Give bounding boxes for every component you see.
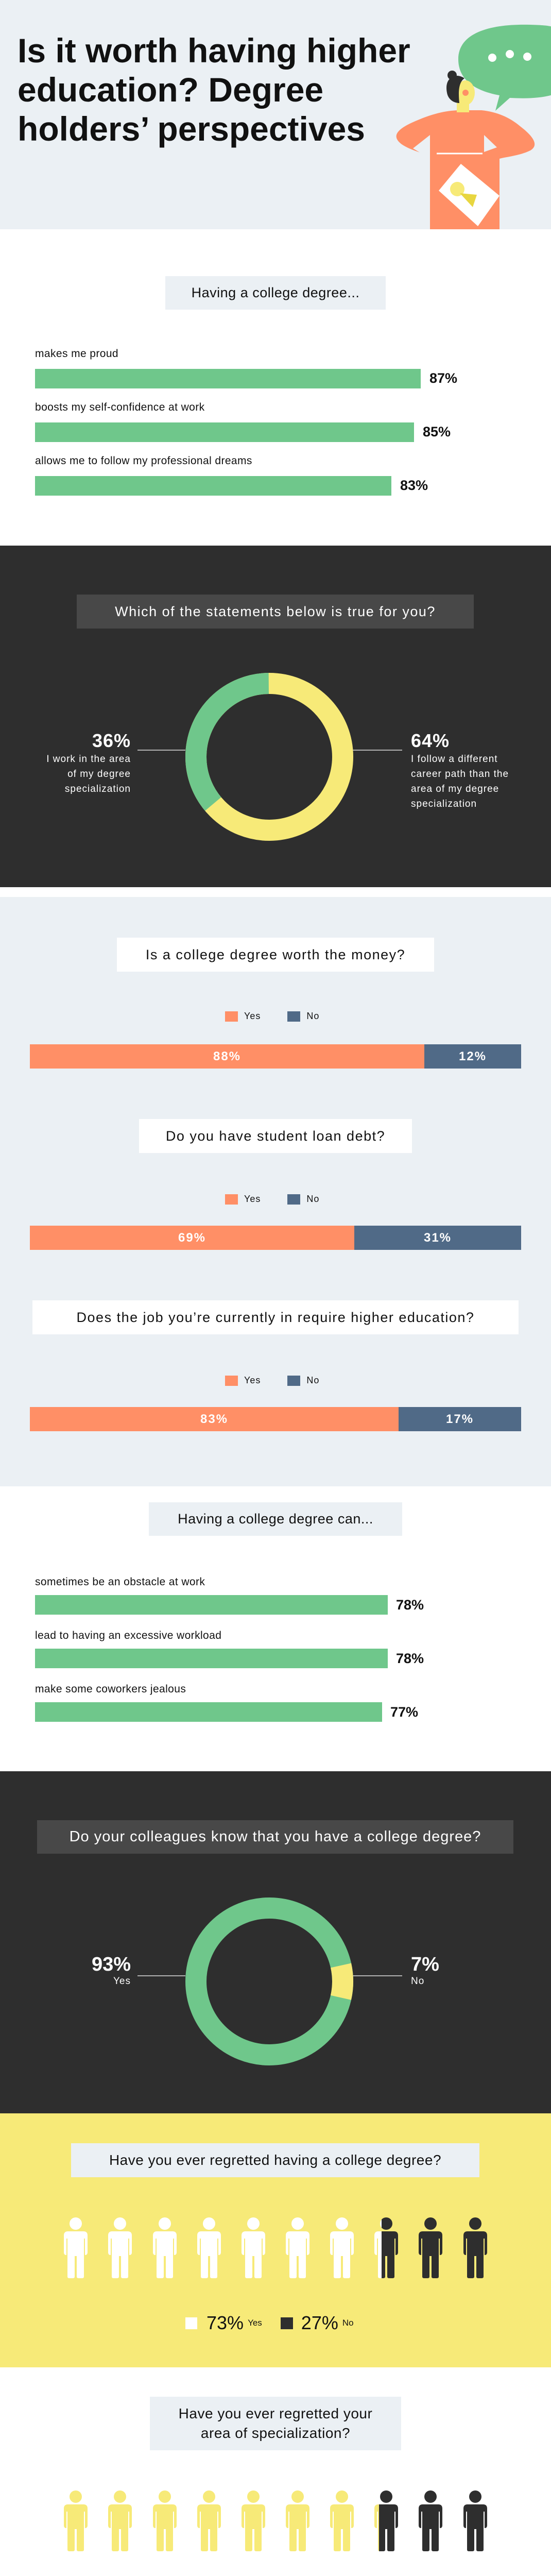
question: worth the money: 88% xyxy=(213,1049,241,1063)
bar: makes me proud xyxy=(35,348,457,388)
heading: Have you ever regretted your xyxy=(179,2405,372,2421)
question: job requires higher education: 83% xyxy=(200,1412,228,1426)
title: Is it worth having higher education? Degree holders’ perspectives xyxy=(18,31,410,148)
question: worth the money: Yes xyxy=(244,1011,261,1021)
pictogram: people 73% xyxy=(64,2217,487,2278)
bar: excessive workload: lead to having an excessive workload xyxy=(35,1630,221,1641)
question: worth the money: Is a college degree worth the money? xyxy=(146,947,405,962)
callout: 64%: I follow a different xyxy=(411,754,498,765)
heading xyxy=(150,2397,401,2450)
panel: regretted specialization xyxy=(64,2397,487,2551)
bar: boosts self-confidence: boosts my self-confidence at work xyxy=(35,401,205,413)
question: job requires higher education: No xyxy=(306,1375,319,1385)
donut chart xyxy=(137,1897,402,2065)
callout: 36%: I work in the area xyxy=(46,754,131,765)
question: student loan debt: Do you have student loan debt? xyxy=(166,1128,385,1144)
question: job requires higher education: 17% xyxy=(446,1412,474,1426)
header section xyxy=(0,0,551,229)
illustration: person with speech bubble and diploma xyxy=(397,25,551,229)
question: job requires higher education: Yes xyxy=(244,1375,261,1385)
bar: coworkers jealous: make some coworkers jealous xyxy=(35,1683,186,1695)
bar: coworkers jealous xyxy=(35,1683,418,1722)
callout: 93% yes: Yes xyxy=(113,1976,131,1987)
heading: Do your colleagues know that you have a college degree? xyxy=(70,1828,481,1845)
bar: boosts self-confidence xyxy=(35,401,451,442)
question: student loan debt: 31% xyxy=(424,1230,452,1245)
bar: boosts self-confidence: 85% xyxy=(423,424,451,439)
question: student loan debt xyxy=(30,1119,521,1250)
panel: yes/no questions xyxy=(0,897,551,1486)
bar: professional dreams: allows me to follow my professional dreams xyxy=(35,455,252,467)
callout: 36%: specialization xyxy=(65,784,131,794)
heading: Having a college degree... xyxy=(192,285,359,300)
donut chart xyxy=(137,673,402,841)
callout: 93% yes xyxy=(92,1954,131,1987)
legend: 73% yes 27% no: 73% xyxy=(206,2312,244,2333)
question: worth the money xyxy=(30,938,521,1069)
question: job requires higher education xyxy=(30,1300,521,1431)
callout: 93% yes: 93% xyxy=(92,1954,131,1975)
question: student loan debt: No xyxy=(306,1194,319,1204)
callout: 7% no: 7% xyxy=(411,1954,439,1975)
bar: coworkers jealous: 77% xyxy=(390,1704,418,1720)
panel: colleagues know dark xyxy=(0,1771,551,2113)
callout: 64% xyxy=(411,730,509,809)
bar: obstacle: sometimes be an obstacle at work xyxy=(35,1576,205,1588)
legend: 73% yes 27% no: No xyxy=(342,2318,354,2328)
callout: 7% no xyxy=(411,1954,439,1987)
heading xyxy=(37,1820,513,1854)
heading: Have you ever regretted having a college degree? xyxy=(109,2152,441,2168)
callout: 64%: area of my degree xyxy=(411,784,499,794)
question: worth the money: 12% xyxy=(459,1049,487,1063)
question: student loan debt: 69% xyxy=(178,1230,206,1245)
panel: having a college degree xyxy=(35,276,457,496)
heading xyxy=(149,1502,402,1536)
callout: 64%: 64% xyxy=(411,730,450,751)
panel: college degree can xyxy=(35,1502,424,1722)
callout: 36%: 36% xyxy=(92,730,131,751)
bar: makes me proud: makes me proud xyxy=(35,348,118,360)
question: job requires higher education: Does the job you’re currently in require higher education? xyxy=(77,1310,474,1325)
heading xyxy=(77,595,474,629)
legend: 73% yes 27% no: Yes xyxy=(248,2318,262,2328)
panel: regretted degree yellow xyxy=(0,2113,551,2367)
heading: Which of the statements below is true for you? xyxy=(115,604,436,619)
question: worth the money: No xyxy=(306,1011,319,1021)
heading xyxy=(165,276,386,310)
panel: statements dark xyxy=(0,546,551,887)
bar: obstacle: 78% xyxy=(396,1597,424,1613)
callout: 64%: specialization xyxy=(411,799,477,809)
bar: excessive workload: 78% xyxy=(396,1651,424,1666)
callout: 7% no: No xyxy=(411,1976,424,1987)
heading: Having a college degree can... xyxy=(178,1511,373,1527)
legend: 73% yes 27% no: 27% xyxy=(301,2312,338,2333)
heading xyxy=(71,2143,479,2177)
callout: 36% xyxy=(46,730,131,794)
bar: obstacle xyxy=(35,1576,424,1615)
bar: professional dreams xyxy=(35,455,428,496)
pictogram: people 72% xyxy=(64,2490,487,2551)
callout: 64%: career path than the xyxy=(411,769,509,779)
callout: 36%: of my degree xyxy=(67,769,131,779)
speech bubble xyxy=(458,25,551,111)
question: student loan debt: Yes xyxy=(244,1194,261,1204)
heading: area of specialization? xyxy=(201,2425,350,2441)
bar: professional dreams: 83% xyxy=(400,478,428,493)
legend: 73% yes 27% no xyxy=(185,2312,354,2333)
bar: excessive workload xyxy=(35,1630,424,1668)
bar: makes me proud: 87% xyxy=(429,370,457,386)
